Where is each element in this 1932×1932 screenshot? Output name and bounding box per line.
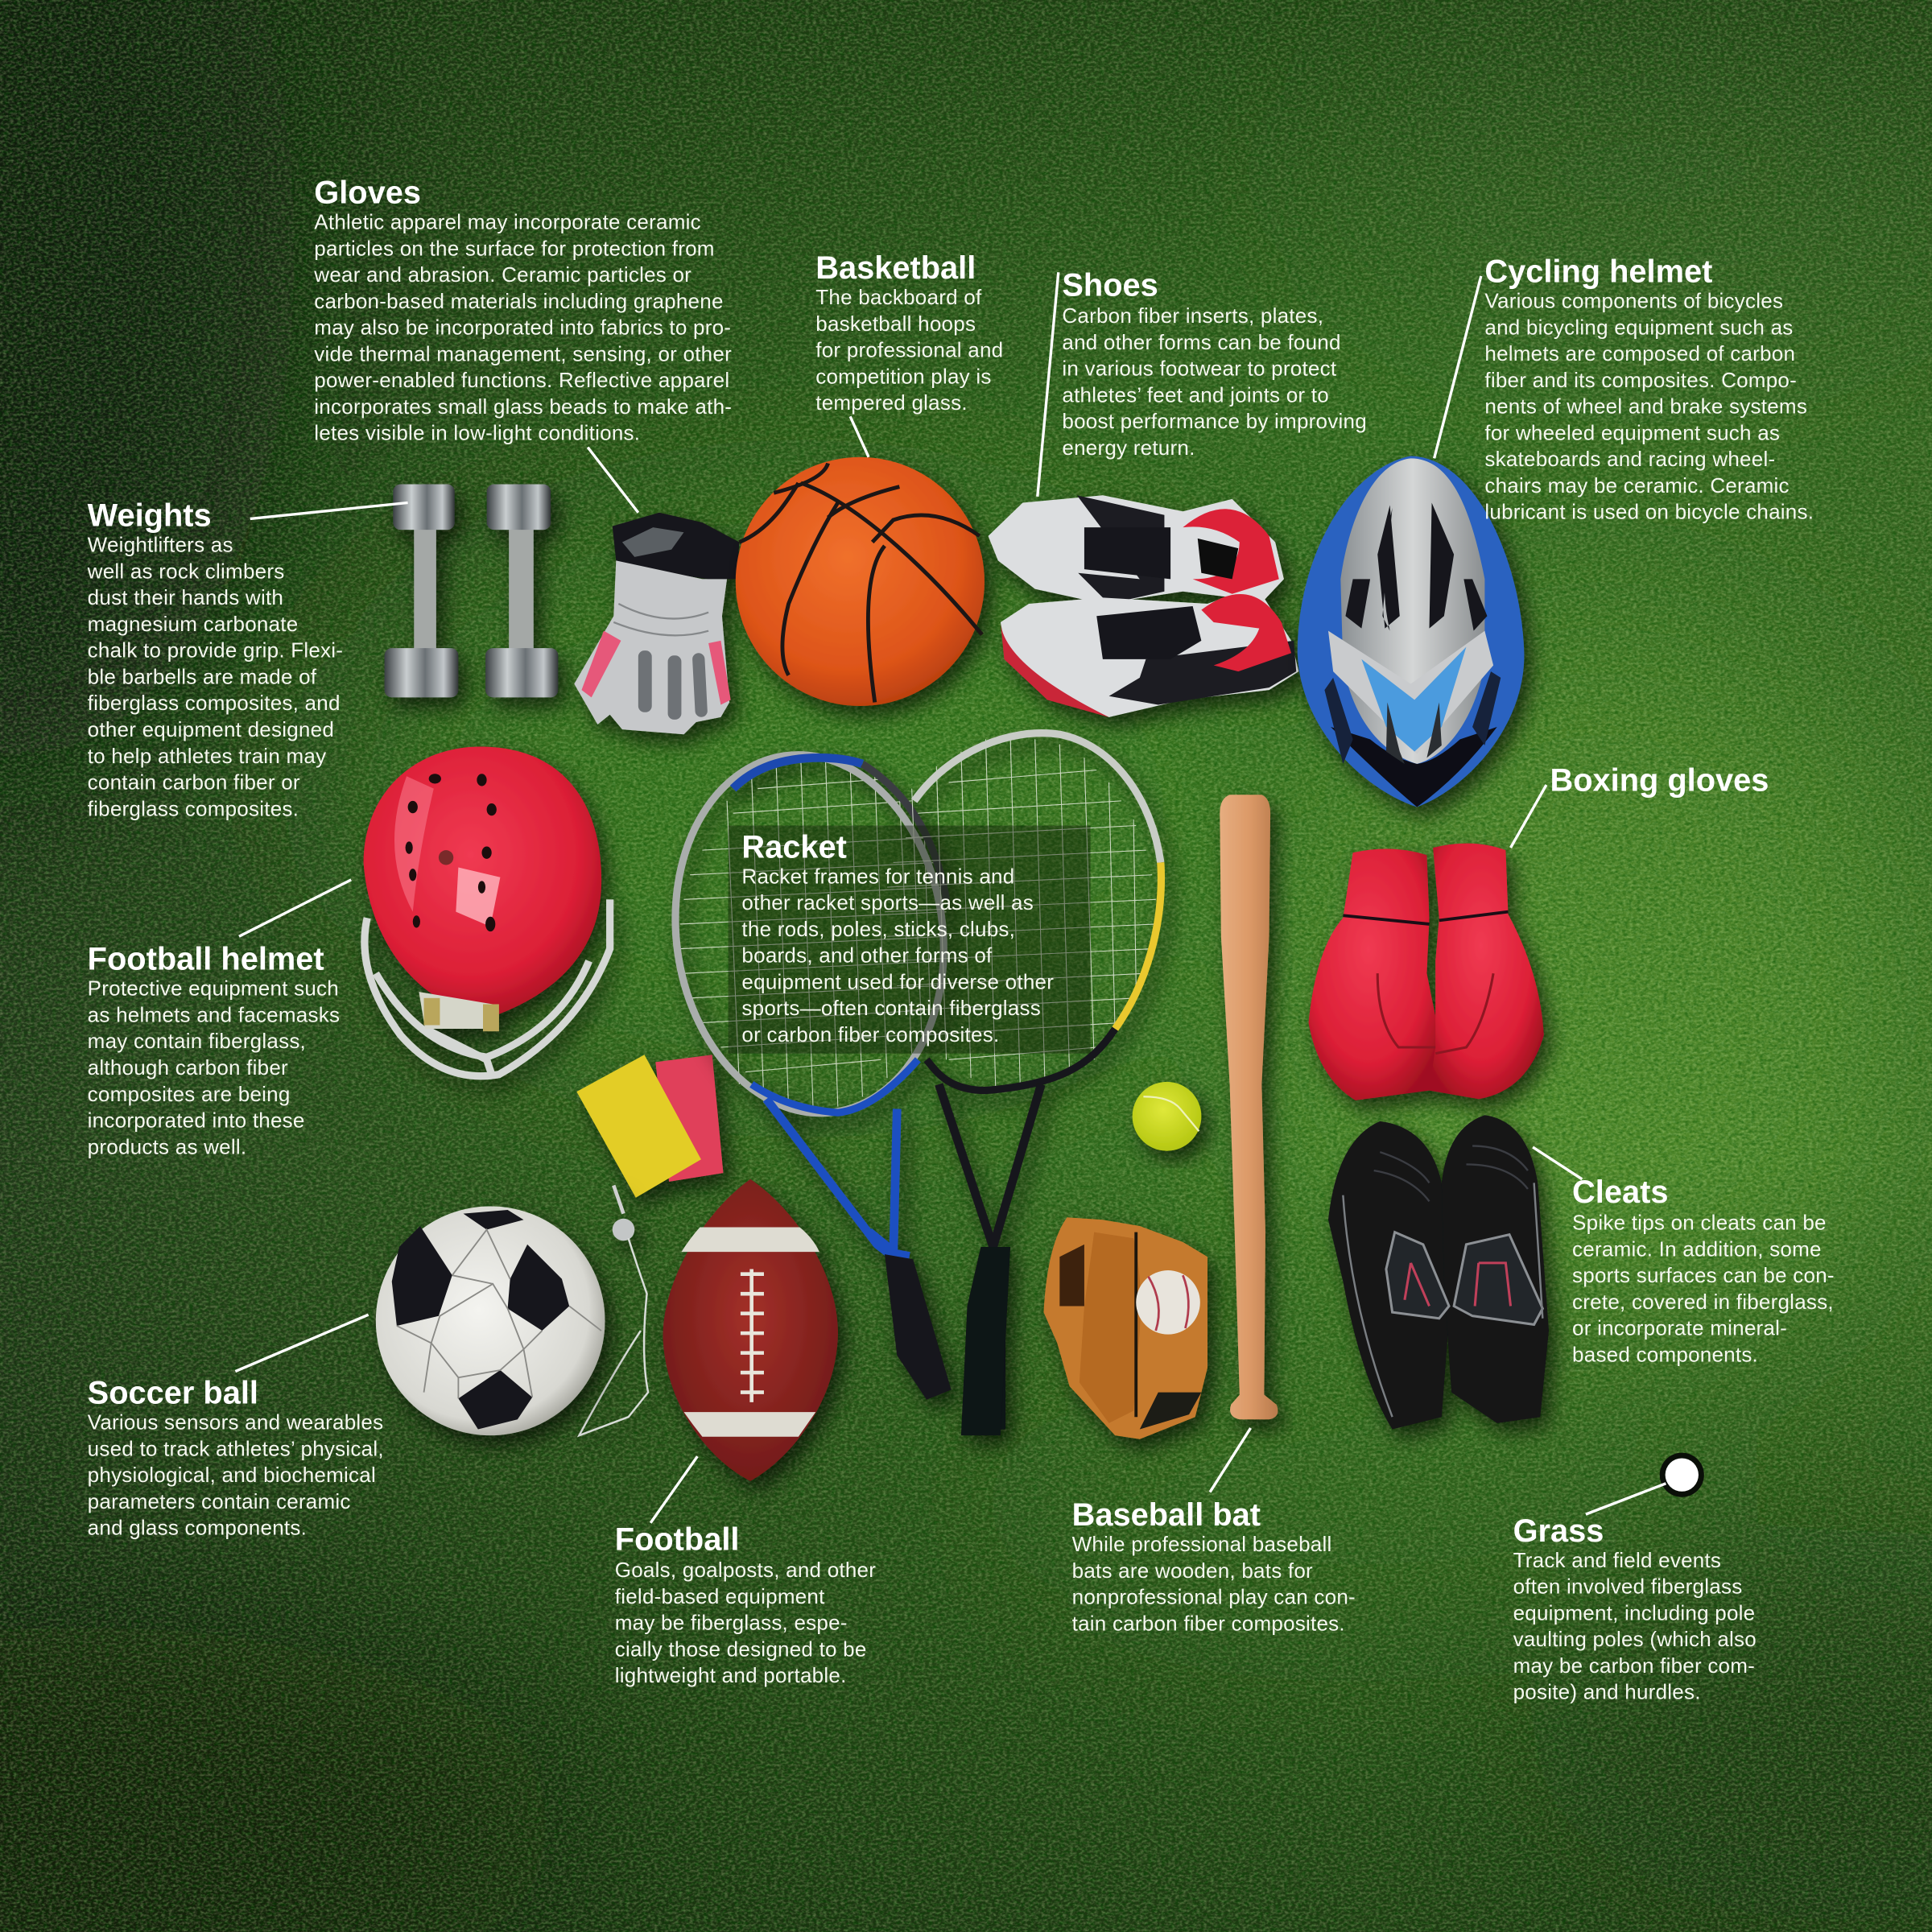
body: weights: fiberglass composites. [88, 796, 299, 820]
body: gloves: wear and abrasion. Ceramic particles or [313, 262, 691, 287]
body: basketball: basketball hoops [815, 312, 976, 336]
body: gloves: may also be incorporated into fabrics to pro- [314, 316, 731, 340]
leader line: weights [250, 502, 408, 518]
body: gloves: Athletic apparel may incorporate ceramic [314, 210, 701, 234]
heading: football helmet: Football helmet [88, 942, 324, 977]
icon: baseball bat [1220, 795, 1278, 1419]
body: baseball bat: While professional baseball [1072, 1532, 1332, 1556]
heading: cycling helmet: Cycling helmet [1484, 254, 1712, 290]
body: weights: fiberglass composites, and [88, 691, 341, 715]
body: racket: boards, and other forms of [741, 943, 993, 968]
icon: whistle [579, 1185, 648, 1435]
text block: cycling helmet [1484, 254, 1814, 524]
icon: grass marker dot [1660, 1453, 1704, 1497]
heading: football: Football [615, 1522, 739, 1558]
body: racket: the rods, poles, sticks, clubs, [741, 917, 1015, 941]
body: cycling helmet: Various components of bicycles [1484, 289, 1783, 313]
body: gloves: power-enabled functions. Reflective apparel [314, 368, 729, 392]
icon: referee cards [576, 1055, 723, 1198]
body: football helmet: Protective equipment such [88, 976, 339, 1001]
body: racket: equipment used for diverse other [741, 969, 1054, 993]
heading: racket: Racket [741, 829, 847, 865]
body: gloves: vide thermal management, sensing, or other [314, 341, 732, 365]
body: football helmet: although carbon fiber [88, 1055, 288, 1080]
body: weights: magnesium carbonate [88, 612, 298, 636]
body: cycling helmet: lubricant is used on bicycle chains. [1484, 500, 1814, 524]
leader line: cycling helmet [1435, 276, 1481, 458]
body: grass: posite) and hurdles. [1513, 1680, 1701, 1704]
panel: racket translucent backing [729, 826, 1091, 1054]
icon: gloves [574, 513, 739, 734]
leader line: basketball [850, 416, 869, 457]
heading: shoes: Shoes [1062, 267, 1158, 303]
body: weights: well as rock climbers [87, 559, 284, 583]
bottom shoe [1001, 587, 1298, 717]
body: weights: to help athletes train may [88, 744, 326, 768]
body: grass: often involved fiberglass [1513, 1575, 1742, 1599]
icon: tennis ball [1133, 1082, 1201, 1151]
body: football: lightweight and portable. [615, 1663, 847, 1687]
text block: gloves [313, 175, 732, 445]
body: grass: equipment, including pole [1513, 1600, 1755, 1624]
body: cleats: or incorporate mineral- [1572, 1316, 1787, 1340]
body: cycling helmet: for wheeled equipment such as [1484, 420, 1780, 444]
heading: grass: Grass [1513, 1513, 1604, 1549]
body: weights: chalk to provide grip. Flexi- [88, 638, 343, 663]
text block: shoes [1062, 267, 1367, 460]
body: baseball bat: nonprofessional play can con- [1072, 1585, 1356, 1609]
icon: cycling helmet [1298, 456, 1524, 807]
icon: cleats [1328, 1115, 1549, 1430]
icon: soccer ball [376, 1206, 605, 1435]
body: shoes: and other forms can be found [1062, 330, 1341, 354]
body: football helmet: may contain fiberglass, [88, 1029, 306, 1053]
text block: baseball bat [1072, 1497, 1356, 1635]
icon: american football [663, 1179, 838, 1481]
body: gloves: carbon-based materials including graphene [314, 289, 724, 313]
body: basketball: competition play is [815, 364, 992, 388]
icon: football helmet [364, 747, 610, 1078]
body: cycling helmet: fiber and its composites. Compo- [1484, 368, 1797, 392]
leader line: baseball bat [1210, 1428, 1251, 1492]
body: cleats: sports surfaces can be con- [1572, 1263, 1835, 1287]
top shoe [989, 495, 1284, 604]
body: shoes: in various footwear to protect [1062, 357, 1337, 381]
leader line: gloves [588, 448, 638, 513]
heading: weights: Weights [88, 498, 212, 534]
body: football helmet: composites are being [88, 1082, 291, 1106]
text block: racket [741, 829, 1054, 1046]
body: weights: dust their hands with [88, 585, 283, 609]
body: cycling helmet: skateboards and racing wheel- [1484, 447, 1775, 471]
text block: basketball [815, 250, 1003, 415]
body: cleats: crete, covered in fiberglass, [1572, 1290, 1834, 1314]
text block: football [615, 1522, 876, 1687]
icon: baseball glove and ball [1043, 1217, 1208, 1439]
icon: dumbbells [385, 485, 558, 697]
leader line: football helmet [239, 880, 351, 936]
body: shoes: Carbon fiber inserts, plates, [1062, 303, 1323, 328]
body: cleats: Spike tips on cleats can be [1572, 1211, 1827, 1235]
body: weights: other equipment designed [88, 717, 334, 741]
leader line: shoes [1038, 272, 1059, 497]
heading: soccer ball: Soccer ball [88, 1375, 258, 1410]
leader line: grass [1586, 1484, 1666, 1514]
text block: football helmet [88, 942, 340, 1158]
body: football: field-based equipment [615, 1584, 825, 1608]
body: grass: vaulting poles (which also [1513, 1627, 1757, 1651]
body: cycling helmet: helmets are composed of carbon [1484, 341, 1795, 365]
body: football: cially those designed to be [615, 1637, 867, 1661]
heading: gloves: Gloves [314, 175, 421, 211]
body: cycling helmet: nents of wheel and brake systems [1484, 394, 1807, 419]
body: cleats: ceramic. In addition, some [1572, 1236, 1822, 1261]
body: football: may be fiberglass, espe- [615, 1611, 848, 1635]
leader line: cleats [1533, 1147, 1582, 1179]
body: football helmet: as helmets and facemasks [88, 1002, 340, 1026]
text block: grass [1513, 1513, 1757, 1704]
body: grass: may be carbon fiber com- [1513, 1653, 1755, 1678]
body: weights: Weightlifters as [88, 533, 233, 557]
body: basketball: tempered glass. [815, 390, 968, 415]
body: soccer ball: physiological, and biochemical [88, 1463, 376, 1487]
body: grass: Track and field events [1513, 1548, 1721, 1572]
body: cycling helmet: chairs may be ceramic. Ceramic [1484, 473, 1790, 497]
icon: boxing gloves [1309, 844, 1544, 1100]
heading: basketball: Basketball [815, 250, 976, 286]
text block: boxing gloves: Boxing gloves [1550, 763, 1769, 799]
icon: black tennis racket [885, 733, 1161, 1435]
body: shoes: athletes’ feet and joints or to [1062, 382, 1329, 407]
heading: baseball bat: Baseball bat [1072, 1497, 1261, 1533]
body: soccer ball: Various sensors and wearables [88, 1410, 383, 1435]
body: racket: Racket frames for tennis and [741, 864, 1014, 888]
body: shoes: energy return. [1062, 436, 1195, 460]
body: soccer ball: and glass components. [88, 1516, 307, 1540]
body: soccer ball: parameters contain ceramic [88, 1489, 351, 1513]
body: racket: or carbon fiber composites. [741, 1022, 999, 1046]
text block: soccer ball [88, 1375, 384, 1540]
body: basketball: The backboard of [815, 285, 982, 309]
body: cleats: based components. [1572, 1342, 1758, 1366]
body: gloves: particles on the surface for protection from [314, 236, 715, 260]
icon: basketball [736, 457, 985, 706]
heading: cleats: Cleats [1572, 1174, 1668, 1210]
body: basketball: for professional and [815, 338, 1003, 362]
leader line: football [650, 1456, 697, 1523]
body: racket: other racket sports—as well as [741, 890, 1034, 914]
icon: blue tennis racket [653, 737, 966, 1400]
body: gloves: incorporates small glass beads to make ath- [314, 394, 732, 419]
text block: weights [87, 498, 343, 820]
leader line: boxing gloves [1511, 785, 1546, 848]
body: football: Goals, goalposts, and other [615, 1558, 876, 1582]
body: soccer ball: used to track athletes’ physical, [88, 1436, 384, 1460]
body: football helmet: products as well. [88, 1134, 246, 1158]
body: weights: ble barbells are made of [88, 664, 317, 688]
body: baseball bat: tain carbon fiber composites. [1072, 1611, 1345, 1635]
text block: cleats [1572, 1174, 1835, 1366]
body: cycling helmet: and bicycling equipment such as [1484, 315, 1794, 339]
body: gloves: letes visible in low-light conditions. [314, 421, 640, 445]
icon: shoes [989, 495, 1298, 717]
leader line: soccer ball [235, 1315, 369, 1372]
body: weights: contain carbon fiber or [88, 770, 300, 795]
body: baseball bat: bats are wooden, bats for [1072, 1558, 1313, 1583]
body: racket: sports—often contain fiberglass [741, 996, 1041, 1020]
body: football helmet: incorporated into these [88, 1108, 305, 1133]
body: shoes: boost performance by improving [1062, 409, 1367, 433]
